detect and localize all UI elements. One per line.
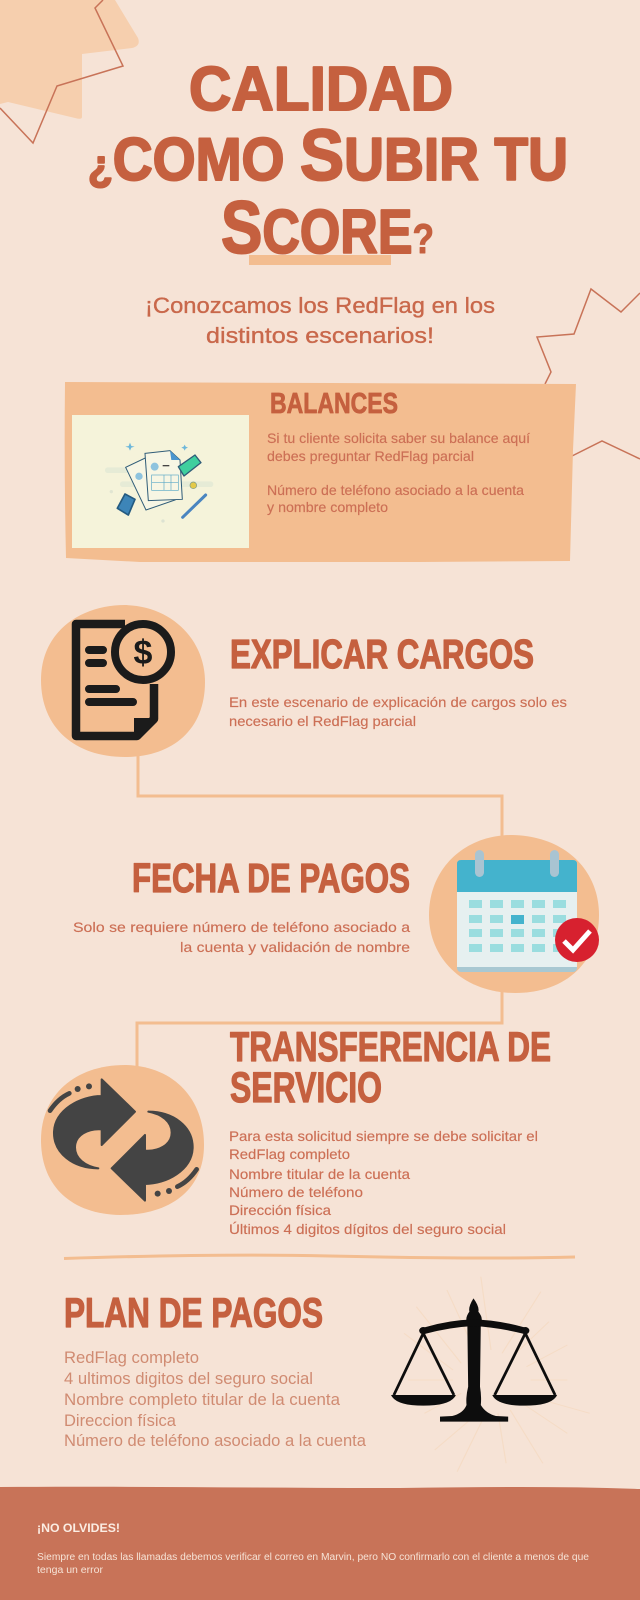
text: plan de pagos list: Nombre completo titular de la cuenta (64, 1391, 341, 1409)
icon: invoice with dollar (41, 605, 205, 757)
text: explicar cargos body (229, 694, 567, 729)
section: explicar cargos (41, 605, 567, 757)
text: plan de pagos list: Direccion física (64, 1412, 177, 1430)
icon: balance scale with rays (391, 1277, 590, 1472)
title: ¿COMO SUBIR TU (88, 116, 568, 196)
section: transferencia de servicio (41, 1023, 551, 1237)
section: plan de pagos (64, 1277, 590, 1472)
footer band (0, 1487, 640, 1600)
subtitle (145, 293, 495, 348)
title: CALIDAD (189, 55, 453, 124)
text: balances body (267, 430, 530, 515)
icon: circular arrows (41, 1065, 204, 1215)
text: plan de pagos list (64, 1349, 367, 1450)
text: transferencia body: Número de teléfono (229, 1184, 363, 1200)
text: balances body: y nombre completo (267, 499, 388, 515)
subtitle: ¡Conozcamos los RedFlag en los (145, 293, 495, 318)
text: transferencia body: RedFlag completo (229, 1146, 350, 1162)
title: SCORE? (221, 186, 434, 269)
heading: transferencia de servicio: SERVICIO (230, 1064, 382, 1112)
illustration: documents on pale card (72, 415, 249, 548)
text: transferencia body: Nombre titular de la cuenta (229, 1166, 410, 1182)
text: balances body: Si tu cliente solicita saber su balance aquí (267, 430, 530, 446)
footer text (37, 1552, 589, 1576)
text: fecha de pagos body: Solo se requiere número de teléfono asociado a (73, 919, 410, 935)
heading: balances: BALANCES (270, 388, 398, 420)
connector line (137, 755, 502, 1068)
footer text: tenga un error (37, 1565, 104, 1576)
text: explicar cargos body: necesario el RedFlag parcial (229, 713, 416, 729)
heading: plan de pagos: PLAN DE PAGOS (64, 1289, 323, 1336)
text: balances body: debes preguntar RedFlag parcial (267, 448, 474, 464)
section: fecha de pagos (73, 835, 599, 993)
text: transferencia body: Para esta solicitud siempre se debe solicitar el (229, 1128, 538, 1144)
text: transferencia body (229, 1128, 538, 1237)
text: balances body: Número de teléfono asociado a la cuenta (267, 482, 524, 498)
icon: invoice with dollar: $ (134, 634, 153, 672)
text: plan de pagos list: 4 ultimos digitos del seguro social (64, 1370, 313, 1388)
panel: balances (65, 382, 576, 562)
subtitle: distintos escenarios! (206, 323, 434, 348)
icon: calendar with check (429, 835, 599, 993)
decoration: top-left blob and star outline (0, 0, 139, 143)
text: fecha de pagos body (73, 919, 410, 955)
footer heading: ¡NO OLVIDES! (37, 1523, 120, 1535)
text: explicar cargos body: En este escenario de explicación de cargos solo es (229, 694, 567, 710)
heading: transferencia de servicio (230, 1023, 551, 1112)
text: transferencia body: Últimos 4 digitos dígitos del seguro social (229, 1221, 506, 1237)
text: plan de pagos list: Número de teléfono asociado a la cuenta (64, 1432, 367, 1450)
decoration: right star outline (537, 289, 640, 459)
title (88, 55, 568, 269)
text: plan de pagos list: RedFlag completo (64, 1349, 199, 1367)
footer text: Siempre en todas las llamadas debemos verificar el correo en Marvin, pero NO confirmarlo con el cliente a menos de que (37, 1552, 589, 1563)
text: transferencia body: Dirección física (229, 1202, 331, 1218)
heading: explicar cargos: EXPLICAR CARGOS (230, 631, 534, 677)
text: fecha de pagos body: la cuenta y validación de nombre (180, 939, 410, 955)
title underline (249, 255, 391, 265)
heading: fecha de pagos: FECHA DE PAGOS (132, 855, 410, 901)
